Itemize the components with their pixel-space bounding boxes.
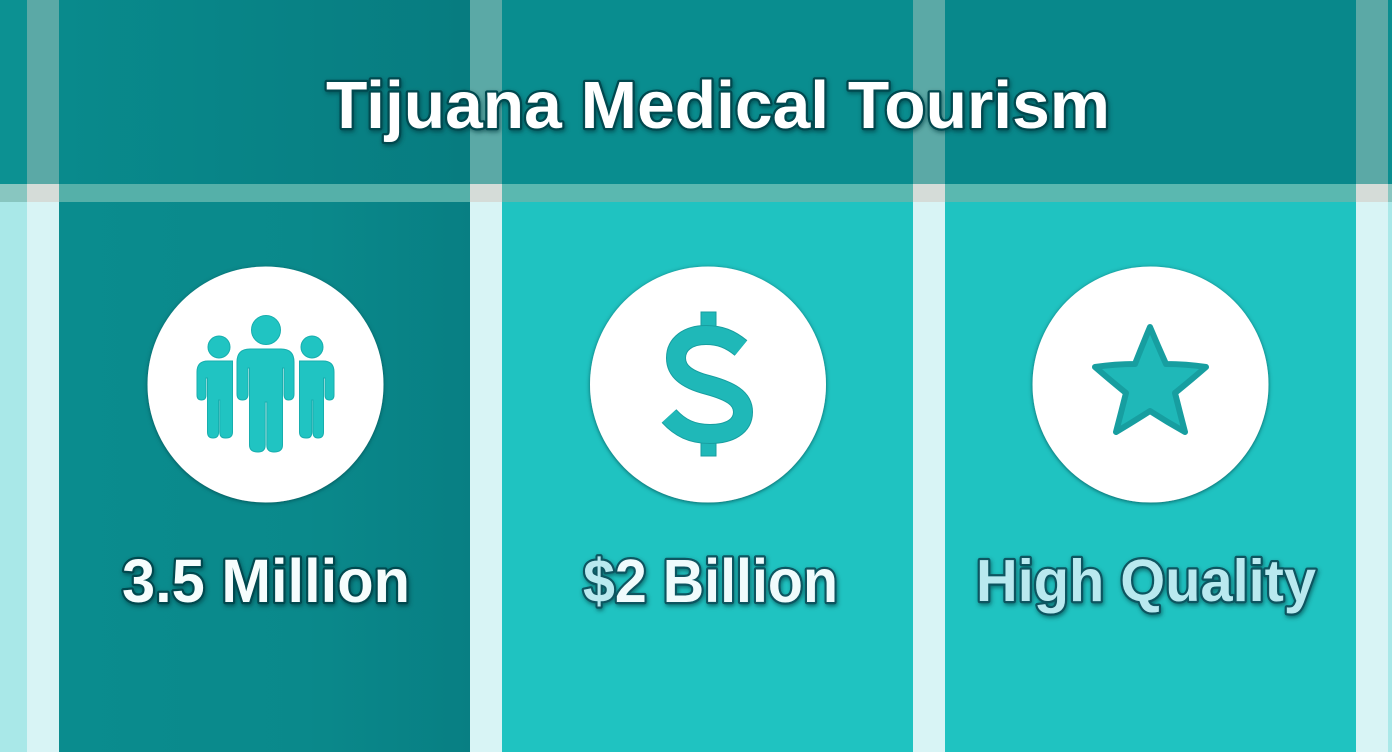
label: $2 Billion: $2 Billion — [583, 547, 838, 615]
panel: header band — [0, 0, 1392, 202]
panel: background columns — [0, 202, 1392, 752]
panel: visitors stat — [122, 266, 410, 615]
panel: quality stat — [976, 266, 1316, 614]
panel: revenue stat — [583, 266, 838, 615]
icon: dollar sign — [590, 266, 826, 502]
label: 3.5 Million: 3.5 Million — [122, 547, 410, 615]
label: High Quality: High Quality — [976, 548, 1316, 614]
icon: star — [1032, 266, 1268, 502]
icon: people — [148, 266, 384, 502]
title: Tijuana Medical Tourism — [326, 68, 1110, 143]
